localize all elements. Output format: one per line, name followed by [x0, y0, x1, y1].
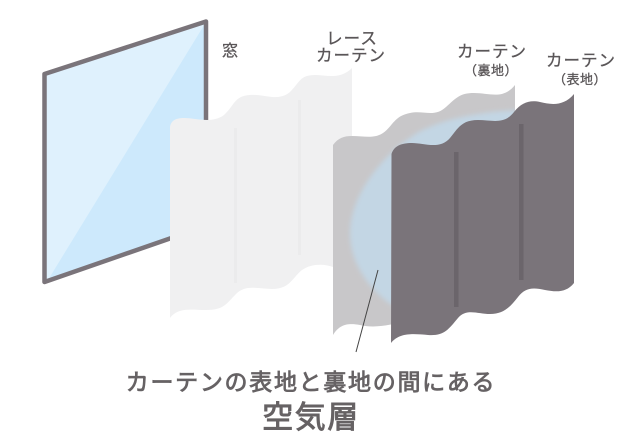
air layer	[350, 110, 520, 315]
leader line	[356, 270, 378, 352]
caption	[126, 369, 496, 435]
label: curtain face: カーテン	[546, 52, 616, 70]
label: curtain lining: カーテン	[457, 43, 527, 61]
curtain face	[391, 94, 574, 343]
lining fabric	[333, 85, 515, 335]
label: lace curtain: カーテン	[316, 47, 386, 65]
face fold left	[454, 152, 458, 307]
label: curtain lining: （裏地）	[464, 63, 518, 78]
label: lace curtain: レース	[326, 30, 378, 48]
window glass	[45, 22, 206, 282]
label: curtain face	[546, 52, 616, 87]
window frame	[44, 22, 206, 282]
lace fabric	[170, 68, 352, 320]
glass highlight	[45, 22, 206, 282]
label: window: 窓	[222, 42, 238, 60]
face fold right	[519, 124, 524, 280]
caption: カーテンの表地と裏地の間にある	[126, 369, 496, 395]
caption: 空気層	[262, 400, 360, 435]
label: curtain face: （表地）	[553, 72, 607, 87]
label: lace curtain	[316, 30, 386, 65]
lace folds	[234, 128, 237, 283]
lace curtain	[170, 68, 352, 320]
curtain lining	[333, 85, 520, 335]
face fabric	[391, 94, 574, 343]
window	[44, 22, 206, 282]
label: curtain lining	[457, 43, 527, 78]
